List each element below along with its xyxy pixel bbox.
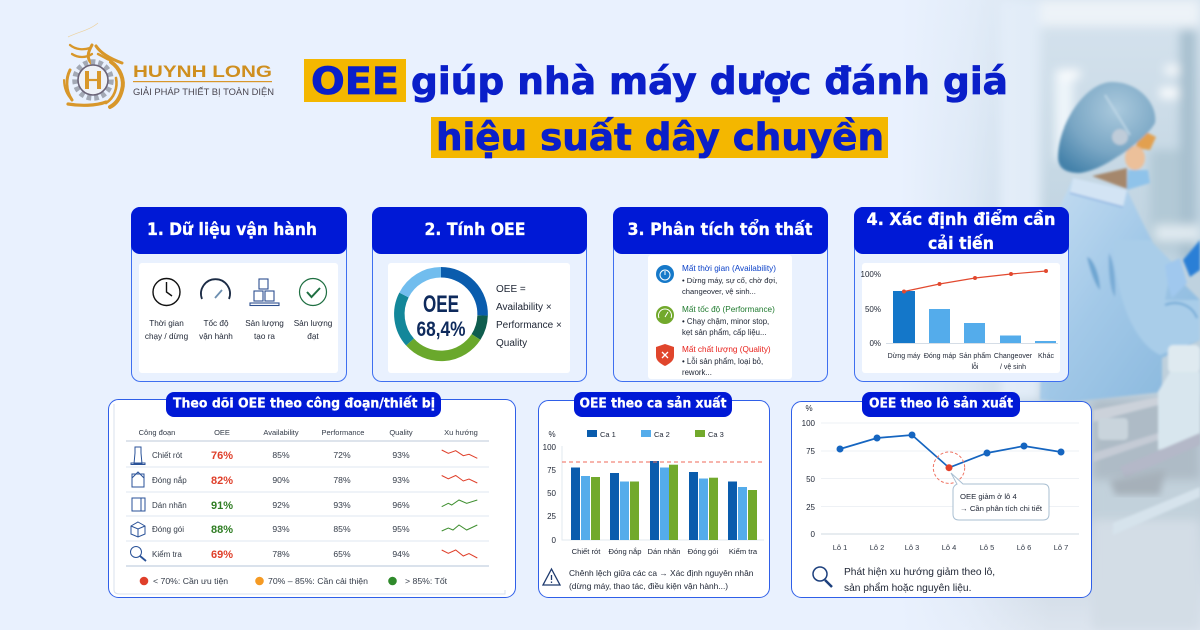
callout (951, 473, 1049, 520)
coat body (1040, 178, 1200, 402)
formula text: Availability × (496, 302, 552, 313)
table: 93% (272, 524, 290, 534)
legend: < 70%: Cần ưu tiện (153, 576, 228, 586)
title: OEE (311, 60, 399, 103)
text: availability (682, 264, 777, 296)
legend (140, 576, 448, 586)
pareto chart: 50% (865, 305, 881, 314)
machinery (1168, 345, 1200, 373)
icon: warning (543, 569, 560, 585)
line chart: 25 (806, 503, 816, 512)
icon: boxes (250, 279, 279, 306)
machinery shadow (1110, 470, 1165, 495)
callout: OEE giảm ở lô 4 (960, 492, 1017, 501)
text: quality: Mất chất lượng (Quality) (682, 345, 771, 354)
bar chart: Đóng nắp (609, 547, 641, 556)
pareto chart: Changeover (994, 353, 1033, 360)
line chart: Lô 1 (833, 543, 847, 552)
panel: 3. Phân tích tổn thất: 3. Phân tích tổn thất (628, 218, 812, 240)
panel: 3. Phân tích tổn thất (613, 207, 828, 382)
icon: quality shield (656, 344, 674, 366)
text: performance: Mất tốc độ (Performance) (682, 305, 775, 314)
sparklines (442, 450, 477, 558)
bar chart: 25 (547, 512, 557, 521)
formula text: OEE = (496, 284, 526, 295)
text: performance (682, 305, 775, 337)
title (304, 59, 1008, 159)
panel: 4. Xác định điểm cần cải tiến (854, 207, 1069, 382)
bar chart (543, 430, 764, 556)
line chart: Lô 6 (1017, 543, 1031, 552)
table: 85% (333, 524, 351, 534)
formula text: Quality (496, 338, 527, 349)
panel: OEE theo ca sản xuất (538, 392, 770, 598)
pareto chart: / vệ sinh (1000, 364, 1026, 371)
formula text (496, 284, 562, 349)
table: Đóng gói (152, 525, 184, 534)
pareto chart: 0% (869, 339, 881, 348)
panel: 1. Dữ liệu vận hành: 1. Dữ liệu vận hành (147, 220, 317, 240)
text: availability: Mất thời gian (Availability) (682, 264, 776, 273)
note (569, 568, 754, 591)
bar chart: 0 (552, 536, 557, 545)
donut chart: OEE (423, 291, 459, 318)
pareto chart: Đóng máp (924, 353, 956, 360)
table: 90% (272, 475, 290, 485)
panel: 4. Xác định điểm cần cải tiến: cải tiến (928, 234, 994, 253)
text: availability: • Dừng máy, sự cố, chờ đợi, (682, 276, 777, 285)
heading pill: Theo dõi OEE theo công đoạn/thiết bị (173, 394, 435, 412)
panel: 2. Tính OEE (372, 207, 587, 382)
heading pill: OEE theo lô sản xuất (869, 394, 1013, 412)
legend: > 85%: Tốt (405, 576, 448, 586)
text: availability: changeover, vệ sinh... (682, 287, 756, 296)
table: Đóng nắp (152, 476, 187, 485)
bar chart: Kiểm tra (729, 547, 758, 556)
line chart: Lô 5 (980, 543, 994, 552)
table: Availability (263, 428, 299, 437)
formula text: Performance × (496, 320, 562, 331)
icon: speed loss (656, 306, 674, 324)
line chart: 0 (811, 530, 816, 539)
table: 96% (392, 500, 410, 510)
table: 93% (333, 500, 351, 510)
bar chart: Chiết rót (572, 547, 601, 556)
neck and mask (1092, 168, 1127, 189)
panel: 4. Xác định điểm cần cải tiến: 4. Xác định điểm cần (866, 210, 1056, 229)
table: 76% (211, 450, 233, 462)
pareto chart: Sản phẩm (959, 352, 991, 360)
heading pill (574, 392, 732, 417)
title: giúp nhà máy dược đánh giá (411, 60, 1008, 103)
heading pill: OEE theo ca sản xuất (580, 394, 727, 412)
labels: vận hành (199, 332, 233, 341)
text: quality (682, 345, 771, 377)
labels: Thời gian (149, 319, 184, 328)
labels: đạt (307, 332, 319, 341)
text: quality: rework... (682, 368, 712, 377)
table: OEE (214, 428, 230, 437)
line chart: 75 (806, 447, 816, 456)
table: 95% (392, 524, 410, 534)
line chart: Lô 4 (942, 543, 956, 552)
pareto chart: lỗi (971, 362, 979, 371)
row icons (130, 447, 146, 561)
icon: check circle (300, 278, 326, 306)
heading pill (862, 392, 1020, 417)
line chart: 100 (802, 419, 816, 428)
table: 65% (333, 549, 351, 559)
table: 93% (392, 450, 410, 460)
line chart (802, 404, 1079, 552)
note (844, 567, 995, 594)
table: 94% (392, 549, 410, 559)
icon: clock (153, 278, 180, 306)
text: performance: • Chạy chậm, minor stop, (682, 317, 769, 326)
bar chart: % (548, 430, 556, 439)
line chart: Lô 3 (905, 543, 919, 552)
bar chart: 100 (543, 443, 557, 452)
labels: tạo ra (254, 332, 275, 341)
line chart: Lô 2 (870, 543, 884, 552)
bar chart: 75 (547, 466, 557, 475)
callout: → Cần phân tích chi tiết (960, 504, 1043, 513)
table: Quality (389, 428, 413, 437)
bar chart: Ca 2 (654, 430, 670, 439)
pareto chart: Dừng máy (888, 353, 921, 360)
table: 72% (333, 450, 351, 460)
bar chart: Đóng gói (688, 547, 719, 556)
icon: magnifier (813, 567, 832, 587)
logo: Huynh Long (64, 23, 274, 107)
table: 82% (211, 475, 233, 487)
labels: Tốc độ (203, 319, 229, 328)
icon: speedometer (201, 279, 230, 299)
note: (dừng máy, thao tác, điều kiện vận hành...) (569, 581, 728, 591)
table (126, 428, 489, 566)
text: performance: kẹt sản phẩm, cấp liệu... (682, 328, 767, 337)
labels: Sản lượng (294, 319, 333, 328)
table: 85% (272, 450, 290, 460)
pareto chart: 100% (861, 270, 881, 279)
donut chart: 68,4% (416, 318, 466, 341)
table: Công đoạn (139, 428, 175, 437)
pareto chart: Khác (1038, 353, 1054, 360)
table: Performance (322, 428, 364, 437)
labels (145, 319, 333, 341)
table: 88% (211, 524, 233, 536)
icon: dragon and gear (64, 23, 123, 107)
table: 78% (272, 549, 290, 559)
table: Kiểm tra (152, 550, 182, 559)
panel: OEE theo lô sản xuất (792, 392, 1092, 598)
rows: Chiết rót (152, 451, 183, 460)
note: Phát hiện xu hướng giảm theo lô, (844, 567, 995, 578)
pareto chart (861, 269, 1058, 371)
table: 91% (211, 500, 233, 512)
labels: chạy / dừng (145, 332, 189, 341)
hairnet (1058, 82, 1155, 173)
table: Xu hướng (444, 428, 478, 437)
logo wordmark: HUYNH LONG (133, 63, 272, 81)
line chart: % (805, 404, 813, 413)
table: 92% (272, 500, 290, 510)
legend: 70% – 85%: Cần cải thiện (268, 576, 368, 586)
line chart: Lô 7 (1054, 543, 1068, 552)
donut chart (399, 272, 483, 356)
heading pill (166, 392, 441, 417)
bar chart: Dán nhãn (648, 547, 680, 556)
title: hiệu suất dây chuyền (436, 116, 884, 159)
panel: 2. Tính OEE: 2. Tính OEE (424, 220, 526, 240)
note: sản phẩm hoặc nguyên liệu. (844, 582, 971, 594)
bar chart: Ca 1 (600, 430, 616, 439)
icon: time loss (656, 265, 674, 283)
bar chart: Ca 3 (708, 430, 724, 439)
note: Chênh lệch giữa các ca → Xác định nguyên nhân (569, 568, 754, 578)
logo: Huynh Long: GIẢI PHÁP THIẾT BỊ TOÀN DIỆN (133, 86, 274, 98)
table: 69% (211, 549, 233, 561)
panel: theo dõi OEE theo công đoạn/thiết bị (108, 392, 516, 598)
labels: Sản lượng (245, 319, 284, 328)
table: Dán nhãn (152, 501, 187, 510)
line chart: 50 (806, 475, 816, 484)
table: 78% (333, 475, 351, 485)
panel: 1. Dữ liệu vận hành (131, 207, 347, 382)
table: 93% (392, 475, 410, 485)
text: quality: • Lỗi sản phẩm, loại bỏ, (682, 357, 763, 366)
bar chart: 50 (547, 489, 557, 498)
background photo: pharmaceutical worker (900, 0, 1200, 630)
